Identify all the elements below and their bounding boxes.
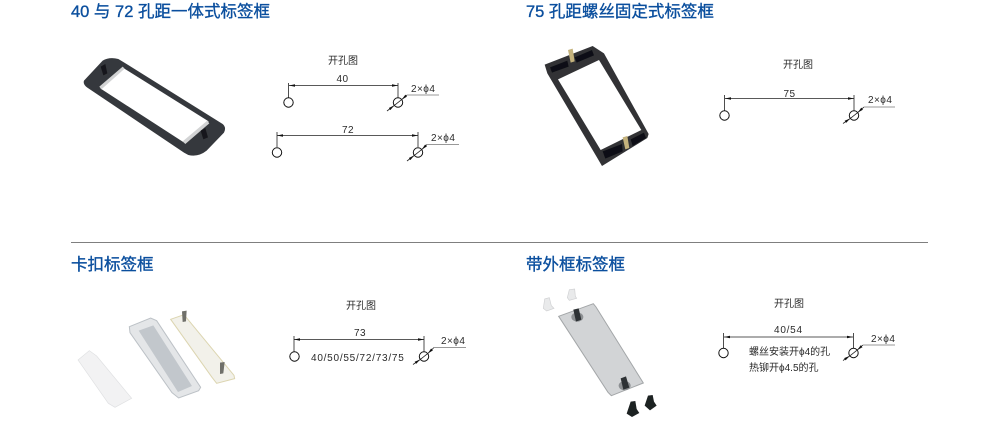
drawing: cut-out 72: 2×ϕ4 [431,133,455,144]
drawing: cut-out 40/54: 热铆开ϕ4.5的孔 [749,361,819,374]
heading: 75: 75 孔距螺丝固定式标签框 [526,2,714,21]
drawing: cut-out 40/54 [719,298,895,374]
drawing: cut-out 40/54: 开孔图 [774,298,804,310]
drawing: cut-out 72 [272,125,459,161]
heading: 40 与 72: 40 与 72 孔距一体式标签框 [71,2,270,21]
drawing: cut-out 75: 2×ϕ4 [868,95,892,106]
drawing: cut-out 75: 开孔图 [783,59,813,71]
drawing: cut-out 73 [290,300,466,364]
photo: black one-piece frame [84,58,225,156]
photo: snap-on label frame parts [78,311,235,407]
drawing: cut-out 73: 开孔图 [346,300,376,312]
drawing: cut-out 40: 2×ϕ4 [411,84,435,95]
drawing: cut-out 40 [284,55,439,111]
heading: snap-on: 卡扣标签框 [71,255,154,274]
drawing: cut-out 75: 75 [784,89,796,100]
drawing: cut-out 40: 40 [336,74,349,85]
drawing: cut-out 73: 2×ϕ4 [441,336,465,347]
drawing: cut-out 40/54: 螺丝安装开ϕ4的孔 [749,345,830,358]
drawing: cut-out 40/54: 2×ϕ4 [871,334,895,345]
drawing: cut-out 40/54: 40/54 [774,325,803,336]
heading: with outer frame: 带外框标签框 [526,255,625,274]
drawing: cut-out 75 [720,59,895,124]
drawing: cut-out 40: 开孔图 [328,55,358,67]
photo: black frame with screws [545,46,649,166]
drawing: cut-out 72: 72 [342,125,354,136]
photo: metal backed frame with rivets [543,289,657,417]
drawing: cut-out 73: 73 [354,328,366,339]
drawing: cut-out 73: 40/50/55/72/73/75 [311,353,405,364]
